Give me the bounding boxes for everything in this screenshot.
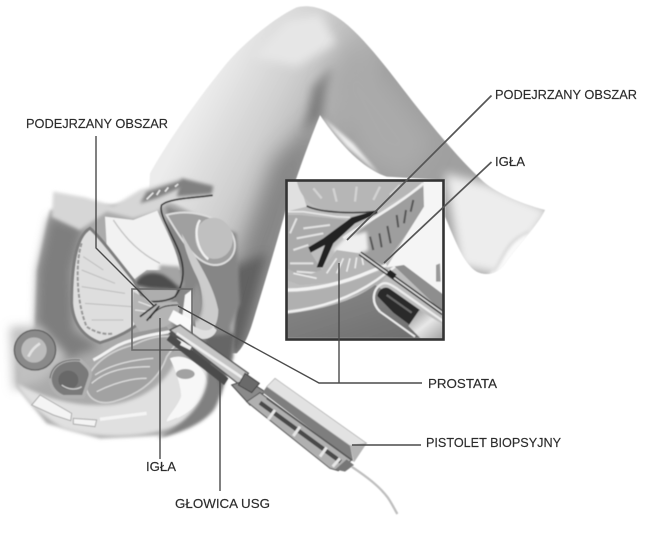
rectum highlight band bbox=[93, 332, 170, 360]
bottom tissue bbox=[288, 285, 421, 338]
scrotum bbox=[167, 213, 235, 265]
label: ultrasound head: GŁOWICA USG bbox=[175, 497, 270, 511]
needle bbox=[360, 253, 443, 313]
white line below bladder bbox=[287, 212, 350, 217]
ultrasound probe cylinder bbox=[408, 310, 444, 338]
gun upper housing side bbox=[263, 387, 353, 462]
shading: inner thigh bbox=[235, 120, 316, 354]
inset border bbox=[286, 180, 444, 340]
label: prostate: PROSTATA bbox=[428, 377, 498, 391]
capsule white band 1 bbox=[287, 265, 387, 290]
testis bbox=[191, 214, 237, 262]
probe tip bbox=[168, 310, 192, 333]
label: right needle: IGŁA bbox=[495, 155, 526, 169]
bowel mass bbox=[72, 228, 150, 343]
gun cross bands bbox=[268, 410, 340, 467]
bladder bbox=[105, 211, 180, 280]
shading: knee crease bbox=[303, 67, 333, 133]
ring right of square bbox=[190, 325, 217, 339]
collar bbox=[238, 373, 259, 393]
right lobe bbox=[357, 187, 424, 265]
leader lines bbox=[96, 96, 492, 491]
leader: prostate bbox=[178, 263, 422, 383]
leader: right needle bbox=[384, 162, 492, 263]
leader: ultrasound head bbox=[219, 377, 221, 491]
bowel ring left bbox=[14, 330, 56, 370]
leader: left needle bbox=[159, 318, 161, 459]
probe lower sheath bbox=[167, 334, 228, 385]
deep tissue right bbox=[167, 207, 240, 397]
left prostate lobe bbox=[286, 215, 347, 277]
upper-left light bbox=[288, 182, 307, 211]
gun upper housing top bbox=[267, 378, 367, 446]
label: biopsy gun: PISTOLET BIOPSYJNY bbox=[426, 436, 562, 450]
bladder floor dark line bbox=[307, 206, 377, 213]
pelvic bone bbox=[167, 357, 207, 422]
marker: target square bbox=[132, 289, 192, 350]
body base bbox=[17, 200, 237, 438]
mid band bbox=[288, 269, 388, 310]
probe lower sheath bbox=[168, 330, 213, 367]
cavity shading left bbox=[37, 217, 100, 360]
urethra dark line bbox=[147, 195, 213, 302]
prostate capsule bbox=[150, 305, 178, 318]
lower tissue band bbox=[17, 358, 209, 436]
top band bbox=[52, 177, 213, 230]
white urethra stripe bbox=[343, 183, 423, 238]
coccyx blocks bbox=[32, 395, 97, 427]
needle sheath bbox=[395, 265, 444, 313]
gun dark stripe bbox=[260, 403, 341, 462]
rectum bbox=[86, 336, 180, 403]
cavity shading lower-left fade bbox=[10, 327, 67, 390]
pubic bone dark right bbox=[177, 178, 213, 197]
gun lower body bbox=[247, 393, 352, 471]
shading: lower thigh bbox=[232, 253, 268, 354]
nozzle bbox=[335, 459, 354, 472]
probe shaft bbox=[170, 325, 248, 385]
inset: magnified view bbox=[286, 180, 447, 340]
label: right suspicious area: PODEJRZANY OBSZAR bbox=[495, 88, 637, 102]
bladder bbox=[296, 182, 304, 196]
leader: biopsy gun bbox=[352, 444, 421, 446]
connector to gun bbox=[232, 380, 265, 405]
shading: foot bbox=[445, 173, 550, 277]
right white area bbox=[387, 180, 444, 297]
bowel loop lower bbox=[50, 360, 90, 397]
pubic bone texture bbox=[140, 180, 187, 203]
outer flesh bbox=[157, 367, 220, 438]
leader: right suspicious area bbox=[347, 96, 492, 240]
penile strip bbox=[182, 233, 218, 337]
bright centre bbox=[333, 230, 370, 254]
cable bbox=[352, 467, 397, 514]
inset background bbox=[288, 185, 442, 324]
lower prostate bbox=[312, 250, 360, 276]
prostate bbox=[132, 292, 179, 332]
shading: shin body bbox=[324, 60, 418, 162]
capsule white band 2 bbox=[287, 267, 395, 312]
leg base bbox=[140, 0, 560, 353]
leader: left suspicious area bbox=[96, 136, 154, 306]
small square bright stripe bbox=[182, 289, 192, 325]
bladder base gray bbox=[157, 265, 184, 287]
label: left suspicious area: PODEJRZANY OBSZAR bbox=[26, 117, 168, 131]
shading: knee highlight bbox=[265, 14, 338, 67]
gun end cap bbox=[350, 443, 367, 462]
ultrasound probe outer white bbox=[374, 283, 444, 322]
bladder base dark crescent bbox=[135, 273, 180, 290]
dark urethra bbox=[308, 210, 377, 267]
label: left needle: IGŁA bbox=[146, 460, 177, 474]
illustration: leg bbox=[140, 0, 560, 353]
biopsy gun and probe bbox=[167, 325, 397, 514]
area below prostate bbox=[132, 327, 180, 352]
shading: shin underside highlight bbox=[324, 118, 378, 172]
illustration: pelvic cross-section bbox=[10, 177, 240, 438]
ultrasound probe dark body bbox=[377, 288, 420, 325]
